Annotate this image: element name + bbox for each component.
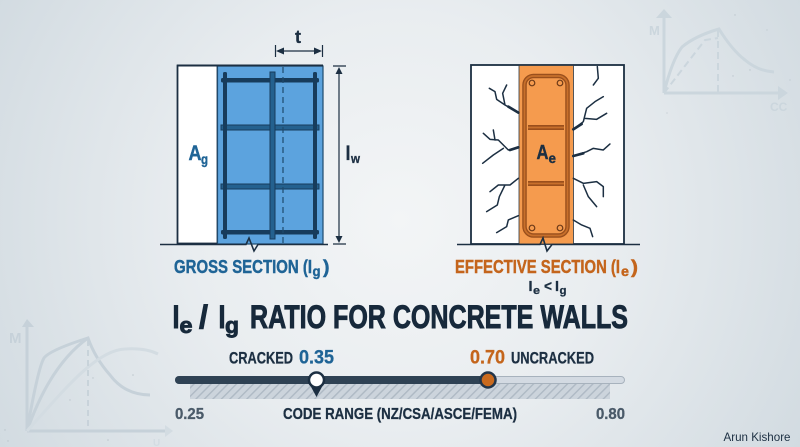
marker: cracked bbox=[309, 372, 324, 397]
panel: effective section bbox=[457, 65, 640, 251]
background chart: top right moment curve: CC bbox=[770, 100, 788, 114]
white wall part bbox=[178, 66, 218, 244]
heading: gross section: g bbox=[312, 263, 320, 279]
label Ae bbox=[536, 142, 556, 166]
slider: ratio range bbox=[175, 348, 625, 423]
cracks bbox=[483, 67, 610, 237]
rebar cage bbox=[221, 72, 319, 239]
title: g bbox=[225, 313, 239, 338]
text: Ie less than Ig: < bbox=[544, 279, 552, 295]
text: Ie less than Ig: e bbox=[533, 285, 540, 297]
dimension lw: I bbox=[346, 142, 350, 165]
background chart: bottom left moment curve bbox=[9, 319, 173, 447]
dimension lw bbox=[333, 66, 361, 244]
marker: uncracked bbox=[480, 372, 496, 388]
title: I bbox=[172, 299, 180, 335]
scale labels bbox=[175, 406, 625, 423]
dimension t bbox=[276, 27, 322, 57]
background chart: top right moment curve bbox=[649, 9, 788, 114]
heading: gross section: GROSS SECTION (I bbox=[174, 256, 312, 277]
label Ae: A bbox=[536, 142, 548, 164]
background chart: bottom left moment curve: M bbox=[9, 330, 22, 347]
background chart: top right moment curve: M bbox=[649, 23, 660, 38]
code range hatch band bbox=[190, 384, 610, 399]
heading: effective section: EFFECTIVE SECTION (I bbox=[455, 256, 620, 277]
value labels: CRACKED bbox=[229, 350, 293, 368]
value labels: UNCRACKED bbox=[511, 350, 594, 368]
blue section bbox=[218, 66, 323, 244]
credit: Arun Kishore bbox=[724, 430, 791, 444]
title: I bbox=[218, 299, 226, 335]
value labels: 0.35 bbox=[299, 348, 334, 368]
value labels bbox=[229, 348, 594, 368]
ground line bbox=[160, 238, 328, 251]
scale labels: 0.80 bbox=[596, 406, 625, 423]
label Ag: g bbox=[201, 151, 208, 167]
text: Ie less than Ig: g bbox=[560, 285, 566, 297]
orange core bbox=[519, 66, 574, 244]
heading: effective section: e bbox=[621, 263, 629, 279]
label Ag: A bbox=[188, 142, 202, 165]
title bbox=[172, 299, 628, 338]
white cracked wall bbox=[471, 65, 624, 244]
heading: gross section: ) bbox=[323, 256, 330, 277]
stirrup cage bbox=[524, 76, 568, 236]
scale labels: 0.25 bbox=[175, 406, 204, 423]
label Ae: e bbox=[548, 150, 556, 166]
ground line bbox=[457, 238, 640, 251]
scale labels: CODE RANGE (NZ/CSA/ASCE/FEMA) bbox=[283, 406, 517, 423]
dimension lw: w bbox=[350, 151, 361, 166]
track bbox=[176, 376, 624, 384]
dimension t: t bbox=[295, 27, 301, 47]
title: / bbox=[199, 299, 208, 335]
title: RATIO FOR CONCRETE WALLS bbox=[250, 299, 628, 335]
title: e bbox=[180, 313, 192, 338]
value labels: 0.70 bbox=[470, 348, 505, 368]
panel: gross section bbox=[160, 27, 361, 251]
heading: effective section: ) bbox=[631, 256, 638, 277]
text: Ie less than Ig: I bbox=[528, 279, 532, 295]
text: Ie less than Ig: I bbox=[555, 279, 559, 295]
text: Ie less than Ig bbox=[528, 279, 566, 297]
